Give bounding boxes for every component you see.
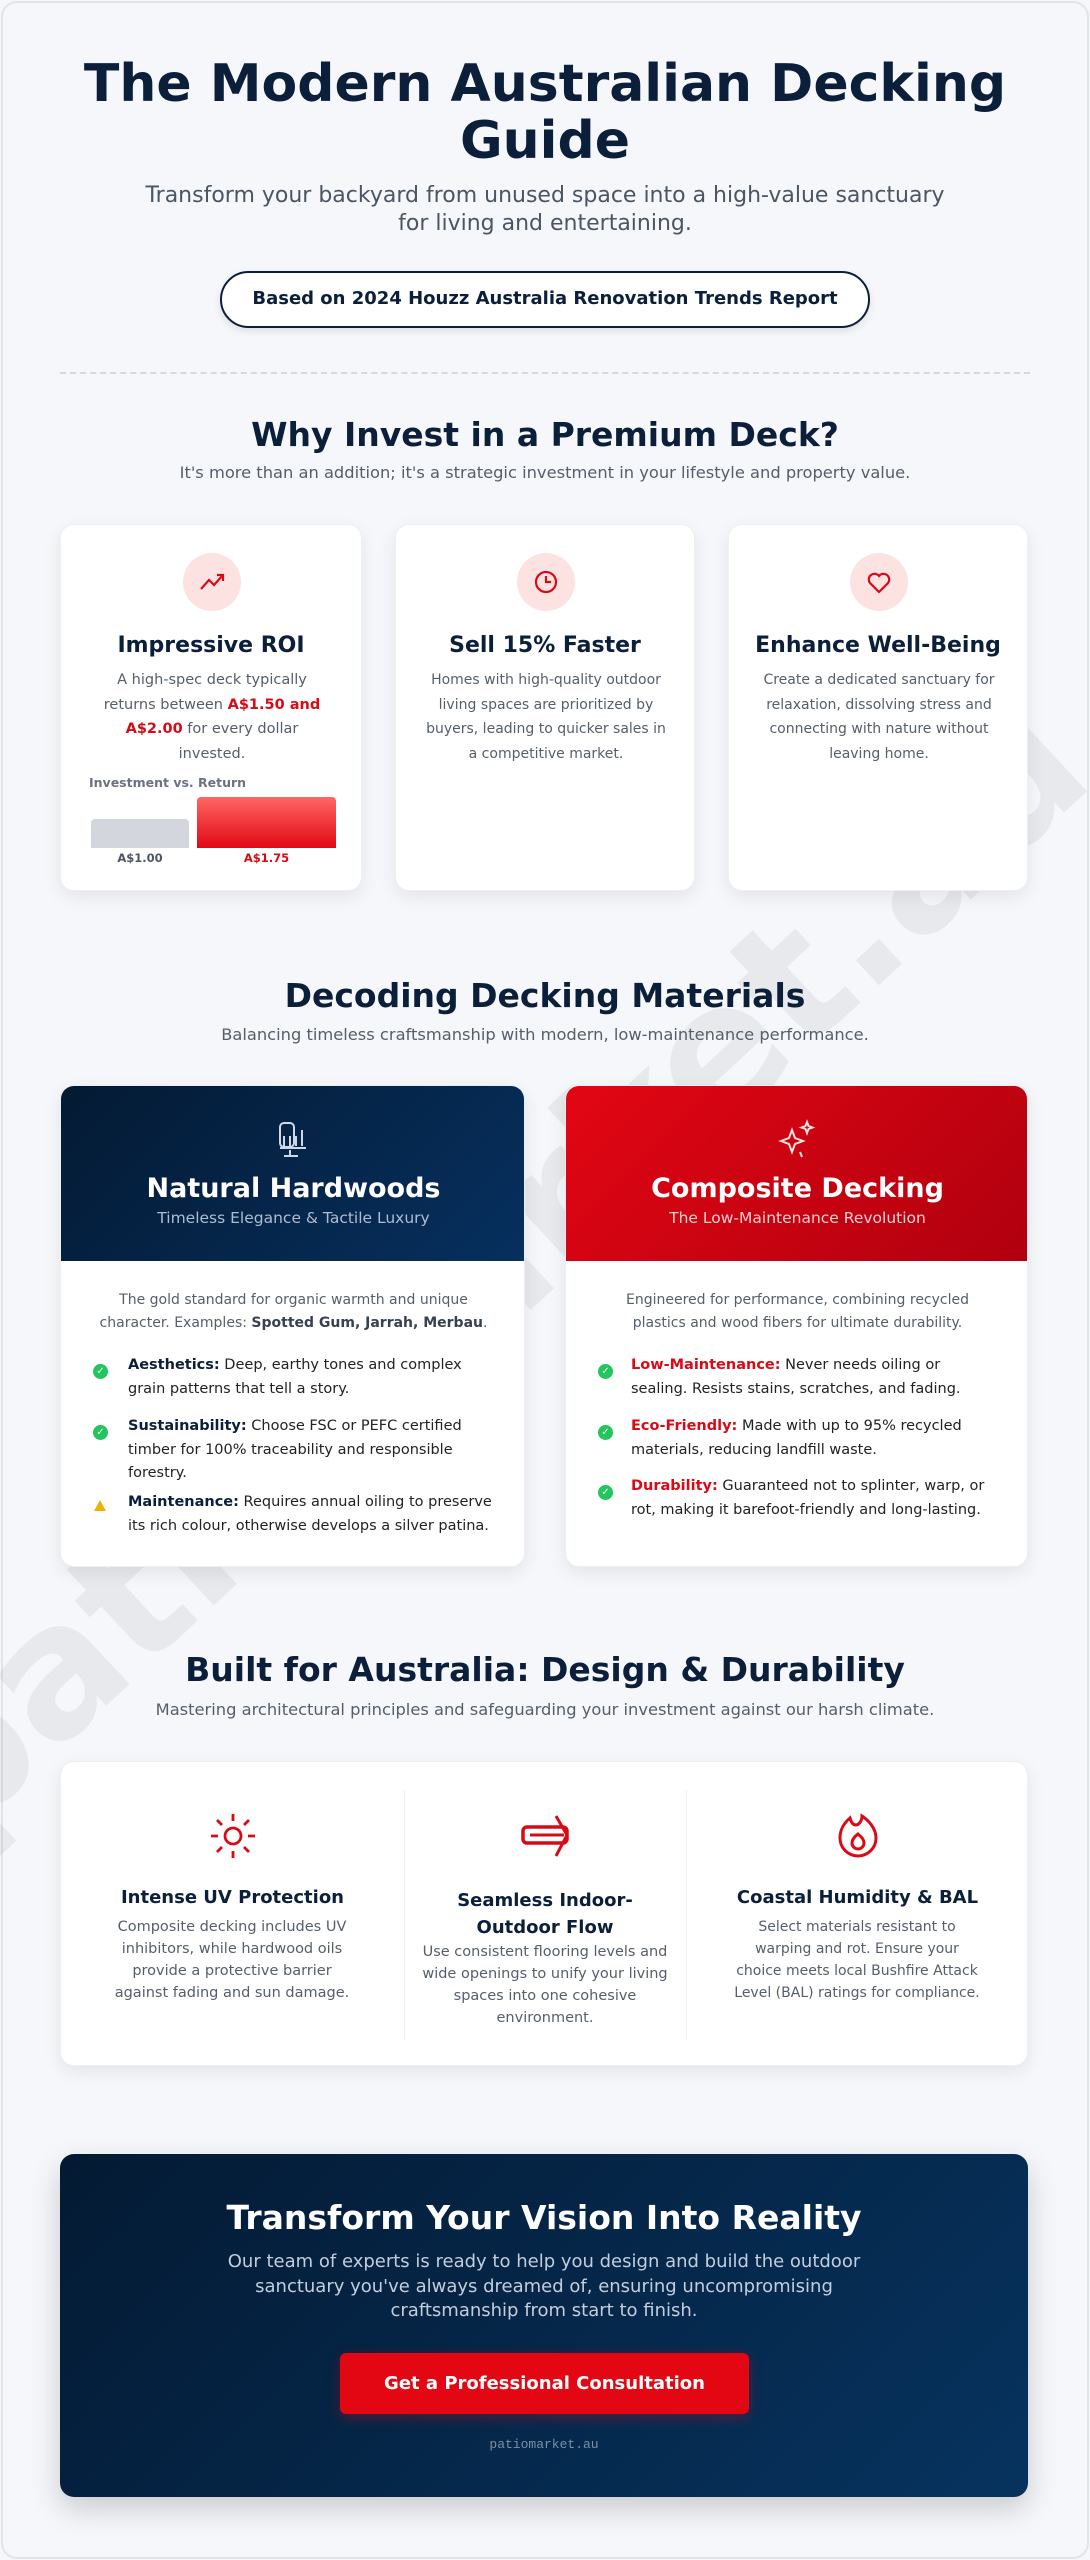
title: The Modern Australian Decking xyxy=(84,54,1006,114)
icon: clock xyxy=(517,553,575,611)
subtitle: for living and entertaining. xyxy=(398,211,692,236)
CTA button xyxy=(340,2353,749,2414)
title: Seamless Indoor- xyxy=(457,1890,633,1911)
subheading: It's more than an addition; it's a strategic investment in your lifestyle and property value. xyxy=(180,463,910,482)
bar chart: Investment vs. Return xyxy=(89,775,246,790)
bar chart: A$1.00 xyxy=(117,851,163,865)
icon: trend xyxy=(183,553,241,611)
title xyxy=(84,54,1006,171)
header xyxy=(61,1086,526,1261)
subtitle xyxy=(145,183,945,236)
text: Create a dedicated sanctuary for relaxation, dissolving stress and connecting with nature without leaving home. xyxy=(763,672,995,762)
bullet: aesthetics: Aesthetics: Deep, earthy tones and complex grain patterns that tell a story. xyxy=(128,1357,462,1396)
icon: wood xyxy=(279,1122,306,1157)
panel: climate xyxy=(60,1761,1028,2066)
intro: The gold standard for organic warmth and unique character. Examples: Spotted Gum, Jarrah, Merbau. xyxy=(100,1292,487,1331)
bullet: maintenance: Maintenance: Requires annual oiling to preserve its rich colour, otherwise develops a silver patina. xyxy=(128,1494,492,1534)
bullet: eco: Eco-Friendly: Made with up to 95% recycled materials, reducing landfill waste. xyxy=(631,1418,962,1458)
title: Impressive ROI xyxy=(117,633,305,658)
CTA button: Get a Professional Consultation xyxy=(384,2373,705,2394)
subtitle: Timeless Elegance & Tactile Luxury xyxy=(157,1209,430,1227)
bullet: sustainability: ✓ xyxy=(96,1427,105,1438)
panel: ROI xyxy=(60,524,362,891)
title: Outdoor Flow xyxy=(477,1917,613,1938)
heading: built for australia: Built for Australia: Design & Durability xyxy=(185,1650,905,1689)
source pill: Based on 2024 Houzz Australia Renovation Trends Report xyxy=(252,288,838,309)
footer url: patiomarket.au xyxy=(489,2437,599,2452)
title: Intense UV Protection xyxy=(121,1887,344,1908)
icon: heart xyxy=(850,553,908,611)
bullet: durability: Durability: Guaranteed not to splinter, warp, or rot, making it barefoot-friendly and long-lasting. xyxy=(631,1478,984,1518)
CTA text: Our team of experts is ready to help you design and build the outdoor sanctuary you've always dreamed of, ensuring uncompromising craftsmanship from start to finish. xyxy=(228,2251,860,2321)
bullet: eco: ✓ xyxy=(601,1427,610,1438)
heading: why invest: Why Invest in a Premium Deck? xyxy=(251,415,839,454)
subtitle: Transform your backyard from unused space into a high-value sanctuary xyxy=(145,183,945,208)
text: Homes with high-quality outdoor living spaces are prioritized by buyers, leading to quicker sales in a competitive market. xyxy=(426,672,666,762)
title: Coastal Humidity & BAL xyxy=(737,1887,978,1908)
title: Enhance Well-Being xyxy=(755,633,1001,658)
heading: materials: Decoding Decking Materials xyxy=(285,976,805,1015)
panel: sell faster xyxy=(395,524,695,891)
icon: flow xyxy=(521,1815,569,1857)
title xyxy=(457,1890,633,1938)
title: Sell 15% Faster xyxy=(449,633,641,658)
text: A high-spec deck typically returns between A$1.50 and A$2.00 for every dollar invested. xyxy=(104,672,320,762)
text: Composite decking includes UV inhibitors, while hardwood oils provide a protective barrier against fading and sun damage. xyxy=(115,1919,349,2001)
icon: sun xyxy=(211,1814,255,1858)
subtitle: The Low-Maintenance Revolution xyxy=(669,1209,926,1227)
title: Composite Decking xyxy=(651,1173,944,1204)
bullet: low maintenance: Low-Maintenance: Never needs oiling or sealing. Resists stains, scratches, and fading. xyxy=(631,1357,961,1396)
bar chart: A$1.75 xyxy=(244,851,289,865)
text: warping and rot. Ensure your xyxy=(755,1941,959,1957)
header xyxy=(566,1086,1029,1261)
bullet: low maintenance: ✓ xyxy=(601,1366,610,1377)
bullet: durability: ✓ xyxy=(601,1487,610,1498)
text: Level (BAL) ratings for compliance. xyxy=(734,1985,980,2001)
title: Guide xyxy=(460,111,630,171)
text: Use consistent flooring levels and wide openings to unify your living spaces into one cohesive environment. xyxy=(422,1944,668,2026)
bar chart xyxy=(89,775,336,865)
bullet: aesthetics: ✓ xyxy=(96,1366,105,1377)
icon: sparkles xyxy=(778,1119,816,1158)
column: flow xyxy=(422,1815,668,2026)
CTA title: Transform Your Vision Into Reality xyxy=(226,2198,862,2237)
icon: flame xyxy=(838,1813,878,1858)
CTA panel xyxy=(60,2154,1028,2497)
source pill xyxy=(220,271,870,328)
text xyxy=(734,1919,980,2001)
column: coastal xyxy=(734,1813,980,2001)
title: Natural Hardwoods xyxy=(146,1173,441,1204)
subheading: Mastering architectural principles and safeguarding your investment against our harsh climate. xyxy=(156,1700,934,1719)
panel: natural hardwoods xyxy=(60,1085,525,1567)
intro: Engineered for performance, combining recycled plastics and wood fibers for ultimate durability. xyxy=(626,1292,969,1331)
panel: composite decking xyxy=(565,1085,1028,1567)
bullet: sustainability: Sustainability: Choose FSC or PEFC certified timber for 100% traceability and responsible forestry. xyxy=(128,1418,462,1481)
text: Select materials resistant to xyxy=(758,1919,956,1935)
text: choice meets local Bushfire Attack xyxy=(736,1963,978,1979)
subheading: Balancing timeless craftsmanship with modern, low-maintenance performance. xyxy=(221,1025,869,1044)
panel: well-being xyxy=(728,524,1028,891)
column: UV xyxy=(115,1814,349,2001)
